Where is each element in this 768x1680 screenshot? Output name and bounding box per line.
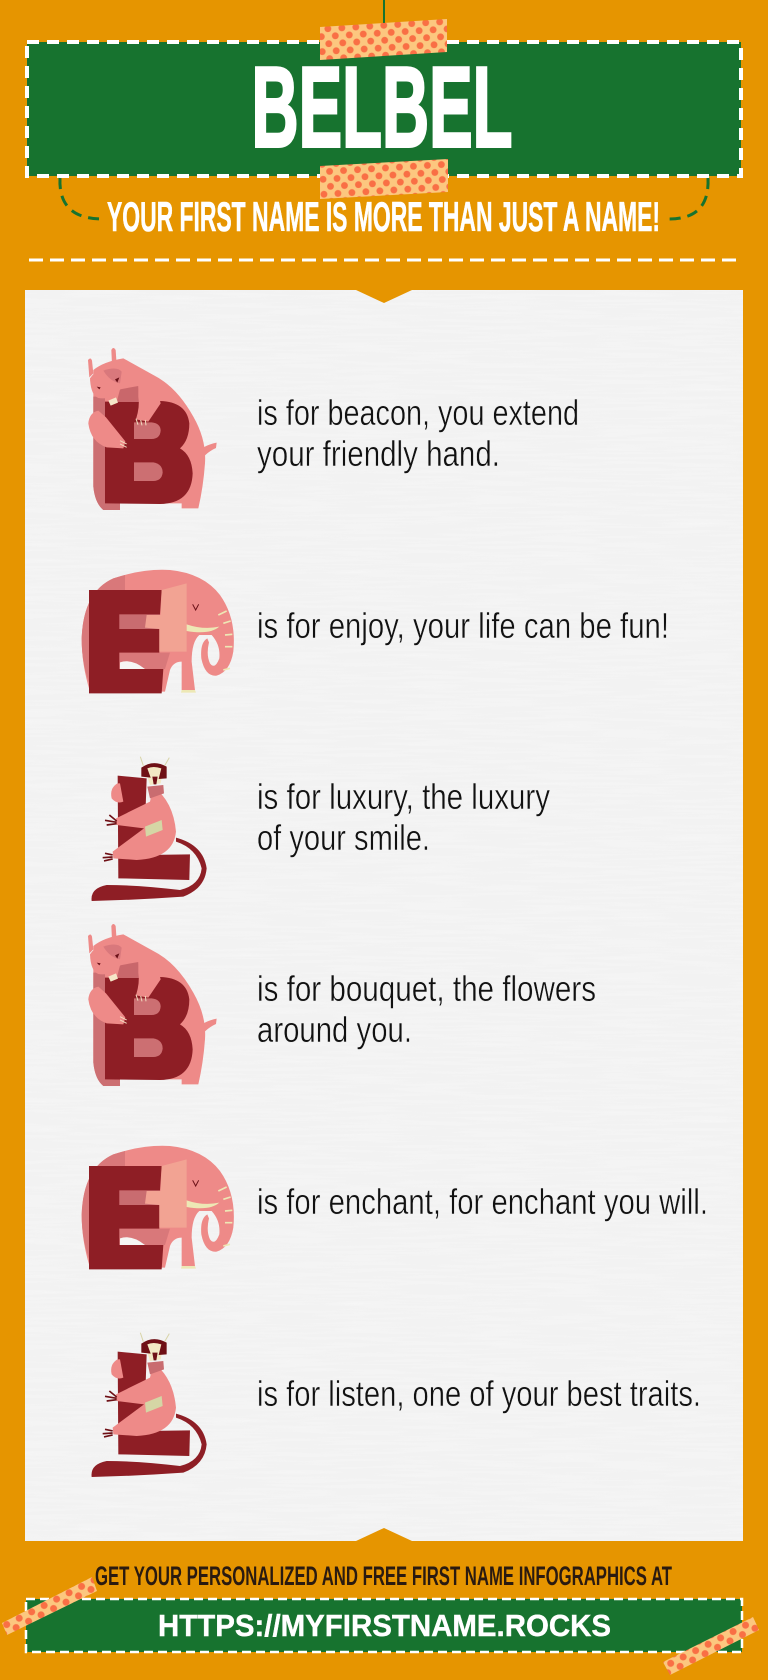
- text: luxury: is for luxury, the luxury: [257, 776, 550, 817]
- title: BELBEL: [252, 44, 512, 172]
- text: beacon: is for beacon, you extend: [257, 392, 579, 433]
- tape: bottom left: [2, 1577, 97, 1635]
- row: L listen: [92, 1333, 701, 1477]
- icon: letter B bear: [88, 348, 217, 510]
- row: L luxury: [92, 757, 550, 901]
- row: B beacon: [88, 348, 579, 510]
- panel: letters: [25, 290, 743, 1541]
- icon: letter B bear: [88, 924, 217, 1086]
- text: beacon: your friendly hand.: [257, 433, 500, 474]
- text: luxury: of your smile.: [257, 817, 430, 858]
- icon: letter L lemur: [92, 1333, 207, 1477]
- text: bouquet: is for bouquet, the flowers: [257, 968, 596, 1009]
- url banner: [26, 1599, 742, 1652]
- icon: letter L lemur: [92, 757, 207, 901]
- row: B bouquet: [88, 924, 596, 1086]
- dashed divider: [29, 258, 739, 262]
- icon: letter E elephant: [82, 570, 234, 693]
- tape: top: [320, 19, 447, 60]
- curved dashes: [60, 178, 708, 219]
- row: E enchant: [82, 1146, 708, 1269]
- text: bouquet: around you.: [257, 1009, 412, 1050]
- tape: bottom: [320, 159, 448, 199]
- tape: bottom right: [663, 1617, 759, 1675]
- title banner: [27, 42, 741, 176]
- icon: letter E elephant: [82, 1146, 234, 1269]
- text: enjoy: is for enjoy, your life can be fun!: [257, 605, 669, 646]
- hanging string: [383, 0, 385, 28]
- row: E enjoy: [82, 570, 669, 693]
- url: HTTPS://MYFIRSTNAME.ROCKS: [158, 1609, 611, 1643]
